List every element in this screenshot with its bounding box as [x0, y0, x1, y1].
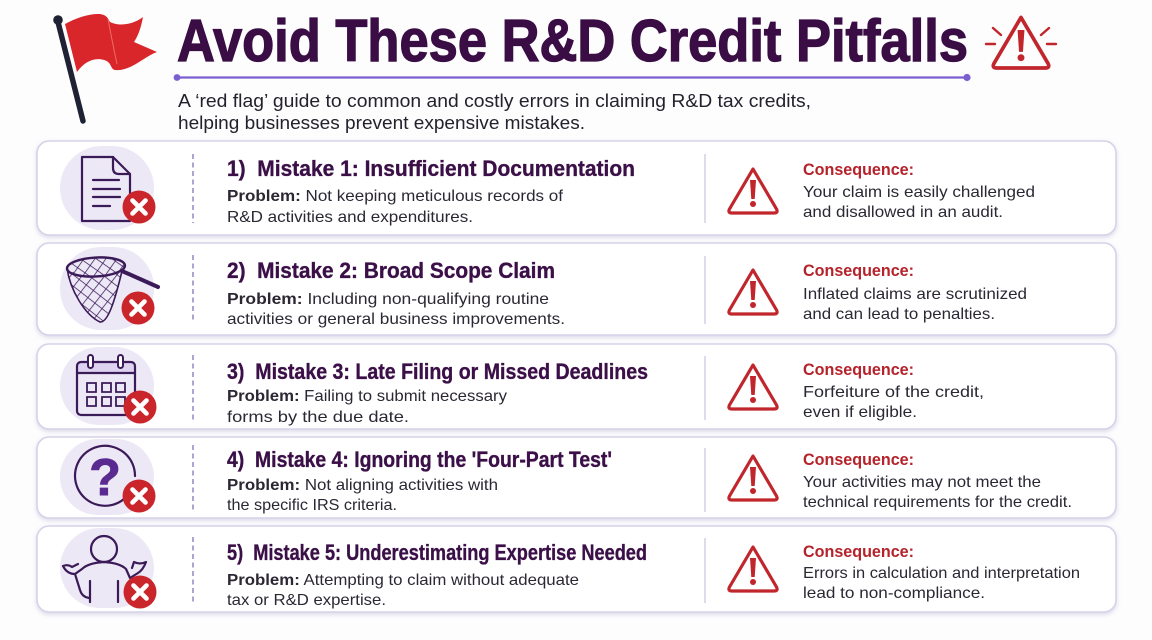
icon: warning with rays	[986, 17, 1056, 68]
problem text: activities or general business improvements.	[227, 311, 565, 328]
consequence: Inflated claims are scrutinized	[803, 286, 1027, 303]
problem text: the specific IRS criteria.	[227, 497, 397, 514]
icon: shrugging person	[60, 528, 156, 608]
consequence: Consequence:	[803, 361, 914, 379]
panel: mistake 5	[37, 526, 1116, 612]
subtitle: helping businesses prevent expensive mistakes.	[178, 112, 585, 133]
heading: 3) Mistake 3: Late Filing or Missed Deadlines	[227, 359, 648, 384]
icon: warning	[729, 456, 777, 500]
heading: 5) Mistake 5: Underestimating Expertise Needed	[227, 540, 647, 565]
subtitle	[178, 90, 811, 133]
icon: net	[60, 247, 158, 330]
heading: 4) Mistake 4: Ignoring the 'Four-Part Test'	[227, 447, 612, 472]
consequence: technical requirements for the credit.	[803, 494, 1072, 511]
icon: document	[60, 146, 156, 230]
icon: warning	[729, 270, 777, 314]
problem text	[227, 388, 507, 426]
problem text: Problem: Attempting to claim without adequate	[227, 572, 579, 589]
consequence: Consequence:	[803, 451, 914, 469]
problem text	[227, 188, 564, 226]
subtitle: A ‘red flag’ guide to common and costly errors in claiming R&D tax credits,	[178, 90, 811, 111]
consequence: Your activities may not meet the	[803, 474, 1041, 491]
panel: mistake 2	[37, 243, 1116, 335]
problem text: Problem: Including non-qualifying routine	[227, 291, 549, 308]
consequence: Your claim is easily challenged	[803, 184, 1035, 201]
problem text	[227, 572, 579, 609]
consequence	[803, 161, 1035, 221]
problem text: Problem: Not keeping meticulous records of	[227, 188, 564, 205]
consequence	[803, 543, 1080, 602]
icon: warning	[729, 365, 777, 409]
consequence: Consequence:	[803, 262, 914, 280]
icon: red flag	[53, 14, 157, 121]
consequence: and disallowed in an audit.	[803, 204, 1003, 221]
icon: question mark: ?	[89, 449, 121, 507]
problem text: R&D activities and expenditures.	[227, 209, 473, 226]
consequence: Errors in calculation and interpretation	[803, 565, 1080, 582]
panel: mistake 1	[37, 141, 1116, 235]
panel: mistake 3	[37, 344, 1116, 429]
problem text: forms by the due date.	[227, 409, 409, 426]
icon: question mark	[60, 439, 156, 515]
heading: 2) Mistake 2: Broad Scope Claim	[227, 258, 555, 283]
title: Avoid These R&D Credit Pitfalls	[177, 8, 968, 74]
icon: warning	[729, 547, 777, 591]
consequence: even if eligible.	[803, 404, 917, 421]
panel: mistake 4	[37, 437, 1116, 518]
consequence: and can lead to penalties.	[803, 306, 995, 323]
icon: calendar	[60, 347, 156, 425]
consequence: Consequence:	[803, 543, 914, 561]
heading: 1) Mistake 1: Insufficient Documentation	[227, 156, 635, 181]
consequence	[803, 361, 984, 421]
consequence	[803, 262, 1027, 323]
consequence	[803, 451, 1072, 511]
problem text: tax or R&D expertise.	[227, 592, 386, 609]
consequence: Consequence:	[803, 161, 914, 179]
consequence: lead to non-compliance.	[803, 585, 985, 602]
problem text	[227, 291, 565, 328]
icon: warning	[729, 169, 777, 213]
consequence: Forfeiture of the credit,	[803, 384, 984, 401]
problem text	[227, 477, 498, 514]
problem text: Problem: Failing to submit necessary	[227, 388, 507, 405]
title underline	[174, 74, 971, 81]
problem text: Problem: Not aligning activities with	[227, 477, 498, 494]
